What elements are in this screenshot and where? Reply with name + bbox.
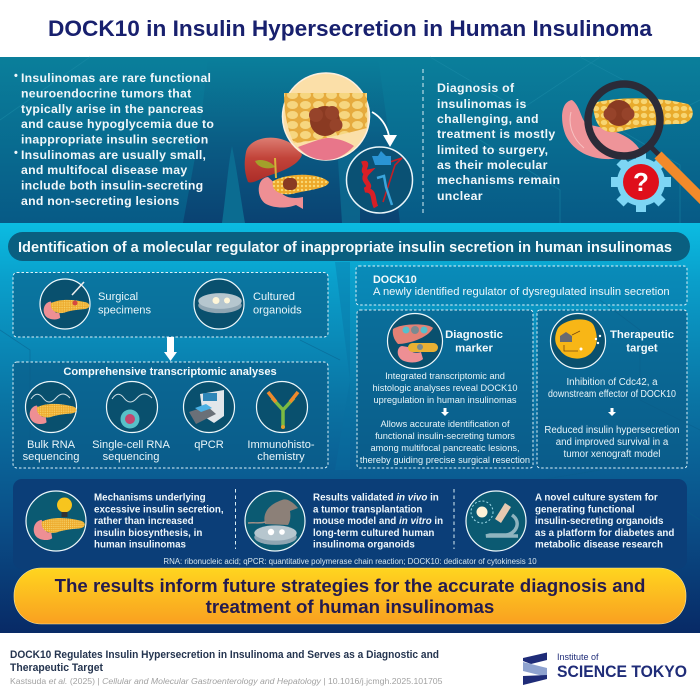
logo: Science Tokyo: Institute of	[557, 652, 599, 662]
icon: pancreas with bulb	[26, 491, 86, 551]
text: culture system: generating functional	[535, 504, 635, 516]
text: diagnostic findings: among multifocal pancreatic lesions,	[370, 443, 520, 453]
text: diagnostic findings: histologic analyses reveal DOCK10	[372, 383, 518, 393]
text: therapeutic findings: Inhibition of Cdc42, a	[566, 377, 658, 388]
labels: methods: qPCR	[194, 439, 224, 451]
panel: transcriptomic analyses	[13, 362, 328, 468]
panel: DOCK10	[356, 266, 687, 305]
heading: therapeutic target: target	[626, 342, 658, 354]
icon: qPCR machine	[184, 382, 234, 432]
arrow: curved to protein	[372, 112, 397, 147]
text: validation: a tumor transplantation	[313, 504, 422, 516]
label: surgical specimens: specimens	[98, 304, 151, 316]
footer citation: Therapeutic Target	[10, 662, 103, 674]
bullet text: and multifocal disease may	[21, 163, 187, 177]
panel: specimens	[13, 272, 328, 337]
diagnosis text	[437, 81, 560, 203]
text: therapeutic findings: Reduced insulin hypersecretion	[544, 425, 680, 436]
diagnosis text: insulinomas is	[437, 97, 527, 111]
arrow: down to analyses	[164, 337, 177, 361]
bullet text: and non-secreting lesions	[21, 194, 180, 208]
bullet text	[14, 70, 214, 208]
text: validation: Results validated	[313, 492, 396, 504]
icon: cultured organoids	[194, 279, 244, 329]
bullet text: Insulinomas are usually small,	[21, 148, 206, 162]
arrow: therapeutic	[608, 408, 616, 416]
icon: single-cell RNA	[106, 382, 158, 432]
dividers	[236, 489, 454, 549]
diagnosis text: mechanisms remain	[437, 173, 560, 187]
labels: methods: Bulk RNA	[27, 439, 76, 451]
icon: tumor cell	[550, 314, 606, 368]
text: validation: in vivo in	[396, 492, 439, 504]
bullet text: •	[14, 147, 18, 159]
labels: methods: sequencing	[103, 451, 159, 463]
text: mechanisms: insulin biosynthesis, in	[94, 528, 202, 539]
title: DOCK10 in Insulin Hypersecretion in Human Insulinoma	[48, 16, 653, 41]
footer citation: et al. (2025) | Cellular and Molecular Gastroenterology and Hepatology | 10.1016/j.jcmgh.2025.101705	[49, 676, 442, 686]
icon: bulk RNA	[26, 382, 76, 432]
text: validation: mouse model and	[313, 516, 399, 527]
text: culture system: as a platform for diabetes and	[535, 528, 674, 539]
label: cultured organoids: organoids	[253, 304, 302, 316]
logo: Science Tokyo	[523, 652, 687, 685]
panel: main section background	[0, 223, 700, 633]
diagnosis text: limited to surgery,	[437, 143, 548, 157]
text: culture system: A novel culture system for	[535, 492, 658, 504]
bullet text: •	[14, 70, 18, 82]
diagnosis text: Diagnosis of	[437, 81, 515, 95]
text: diagnostic findings: thereby guiding precise surgical resection	[360, 455, 530, 465]
arrow: diagnostic	[441, 408, 449, 416]
diagnosis text: challenging, and	[437, 112, 539, 126]
labels: methods: sequencing	[23, 451, 79, 463]
heading: comprehensive analyses: Comprehensive transcriptomic analyses	[63, 366, 277, 378]
illustration: magnified tumor circle	[282, 73, 370, 160]
heading: identification	[8, 232, 690, 261]
diagnosis text: as their molecular	[437, 158, 548, 172]
illustration: protein structure circle	[346, 147, 412, 213]
text: mechanisms: Mechanisms underlying	[94, 492, 206, 504]
bullet text: include both insulin-secreting	[21, 178, 203, 192]
bullet text: typically arise in the pancreas	[21, 102, 204, 116]
text: mechanisms: rather than increased	[94, 516, 194, 527]
text: diagnostic findings	[360, 371, 530, 465]
bullet text: Insulinomas are rare functional	[21, 71, 211, 85]
text: diagnostic findings: functional insulin-secreting tumors	[375, 431, 515, 441]
logo: Science Tokyo: SCIENCE TOKYO	[557, 662, 687, 681]
icon: diagnostic organs	[388, 314, 442, 368]
text: culture system: metabolic disease research	[535, 540, 663, 550]
heading: identification: Identification of a molecular regulator of inappropriate insulin secretion in human insulinomas	[18, 240, 672, 256]
labels: methods: Single-cell RNA	[92, 439, 170, 451]
icon: mouse and dish	[245, 491, 305, 551]
callout: conclusion	[14, 568, 686, 624]
label: cultured organoids: Cultured	[253, 291, 295, 303]
heading: therapeutic target: Therapeutic	[610, 329, 674, 341]
footer citation: Kastsuda	[10, 676, 49, 686]
callout: conclusion: treatment of human insulinomas	[206, 596, 494, 617]
bullet text: and cause hypoglycemia due to	[21, 117, 214, 131]
illustration: liver and pancreas with tumor	[245, 138, 329, 209]
text: therapeutic findings: downstream effector of DOCK10	[548, 389, 677, 400]
diagnosis text: treatment is mostly	[437, 127, 555, 141]
text: validation: long-term cultured human	[313, 528, 434, 539]
text: diagnostic findings: Allows accurate identification of	[380, 419, 510, 429]
text: validation: in vitro in	[399, 516, 443, 527]
label: surgical specimens: Surgical	[98, 291, 138, 303]
bullet text: neuroendocrine tumors that	[21, 86, 191, 100]
labels: methods: Immunohisto-	[247, 439, 315, 451]
divider	[422, 69, 424, 216]
icon: magnifier over pancreas with question gear	[562, 84, 700, 212]
text: diagnostic findings: upregulation in human insulinomas	[374, 395, 517, 405]
labels: methods	[23, 439, 315, 463]
callout: conclusion: The results inform future strategies for the accurate diagnosis and	[55, 575, 645, 596]
labels: methods: chemistry	[257, 451, 305, 463]
icon: antibody	[256, 382, 308, 432]
panel: key results	[13, 479, 687, 569]
diagnosis text: unclear	[437, 189, 483, 203]
abbreviations: RNA: ribonucleic acid; qPCR: quantitative polymerase chain reaction; DOCK10: dedicator of cytokinesis 10	[163, 557, 537, 566]
heading: diagnostic marker: marker	[455, 342, 493, 354]
panel: diagnostic marker	[357, 310, 533, 468]
panel: DOCK10: A newly identified regulator of dysregulated insulin secretion	[373, 286, 670, 298]
text: diagnostic findings: Integrated transcriptomic and	[385, 371, 505, 381]
text: mechanisms: human insulinomas	[94, 540, 187, 550]
icon: microscope	[466, 491, 526, 551]
text: validation: insulinoma organoids	[313, 540, 415, 550]
icon: surgical specimens	[40, 279, 90, 329]
text: therapeutic findings: and improved survival in a	[556, 437, 669, 448]
heading: diagnostic marker: Diagnostic	[445, 329, 503, 341]
text: therapeutic findings: tumor xenograft model	[564, 449, 660, 460]
footer citation	[10, 649, 443, 686]
bullet text: inappropriate insulin secretion	[21, 132, 208, 146]
text: mechanisms: excessive insulin secretion,	[94, 504, 224, 516]
panel: therapeutic target	[537, 310, 687, 468]
text: therapeutic findings	[544, 377, 680, 460]
icon: magnifier over pancreas with question gear: ?	[633, 167, 649, 197]
panel: DOCK10: DOCK10	[373, 274, 417, 286]
panel: background section	[0, 57, 700, 223]
footer citation: DOCK10 Regulates Insulin Hypersecretion in Insulinoma and Serves as a Diagnostic and	[10, 649, 439, 661]
text: culture system: insulin-secreting organoids	[535, 516, 664, 527]
